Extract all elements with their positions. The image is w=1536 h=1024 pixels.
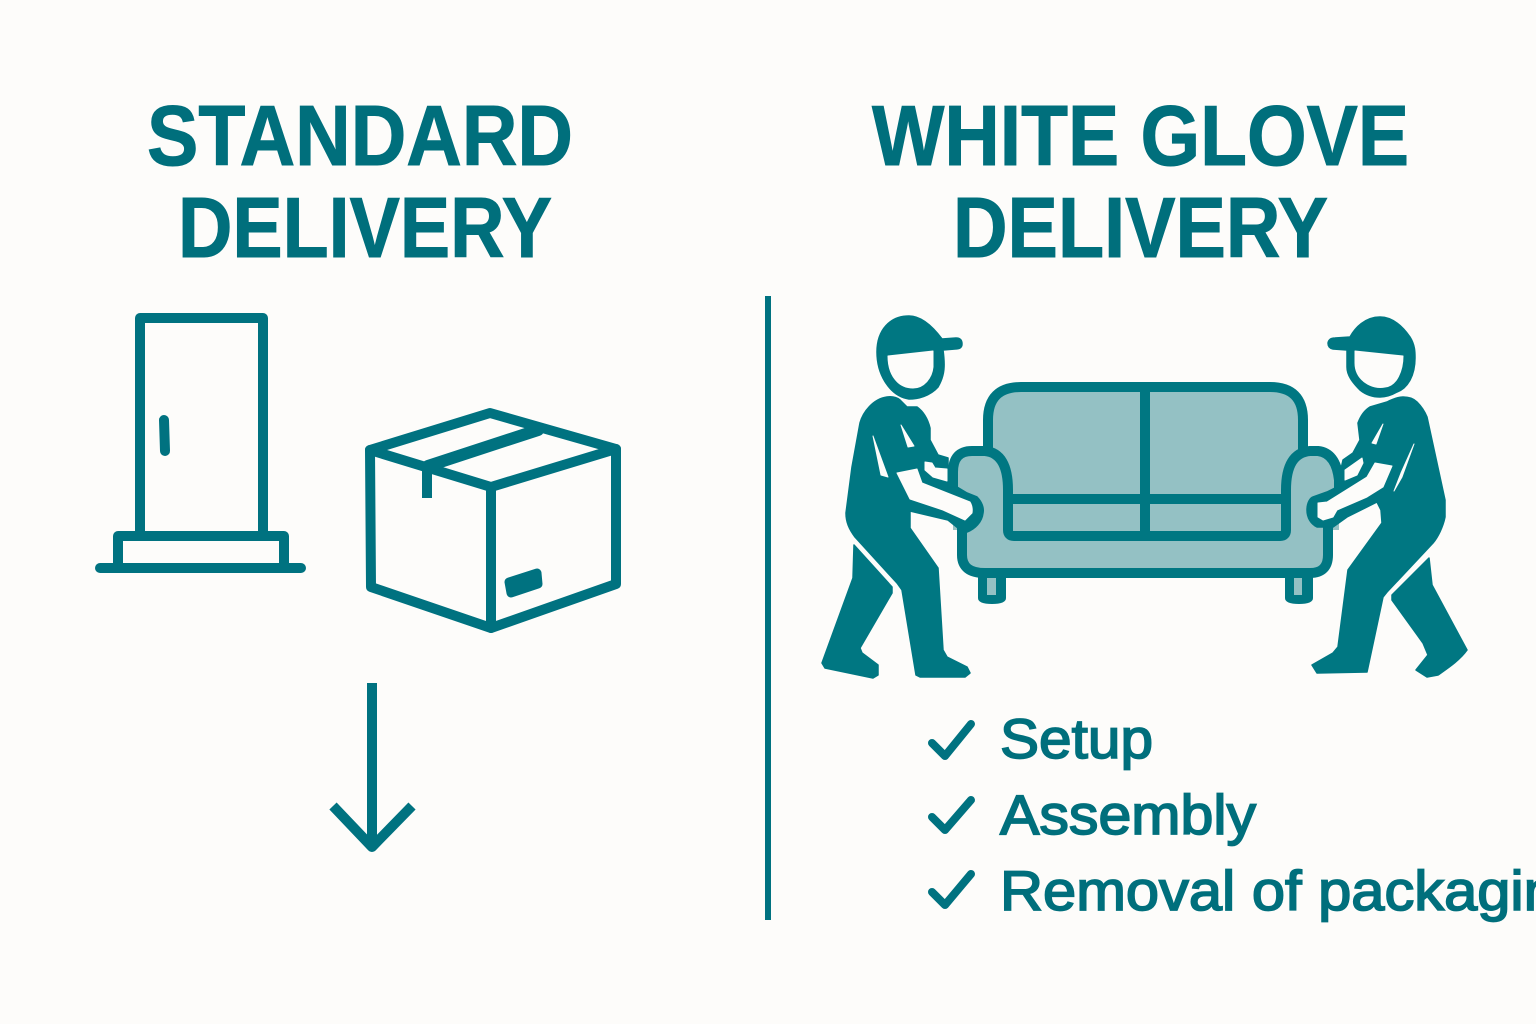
face [1355,351,1403,388]
item: assembly: Assembly [1000,783,1256,846]
body and arm [1307,397,1445,673]
icon: right mover [1307,317,1467,677]
icon: cardboard box [370,413,616,628]
back leg [822,545,892,678]
icon: door [100,318,301,568]
arm highlight [1318,463,1392,520]
heading: white glove delivery: WHITE GLOVE [872,89,1409,184]
back leg [1392,558,1467,677]
heading: white glove delivery: DELIVERY [953,181,1328,276]
panel: white glove delivery [822,89,1536,922]
face [888,351,933,388]
heading: white glove delivery [872,89,1409,276]
icon: left mover [822,316,983,678]
checklist [932,707,1536,922]
arm highlight [897,469,972,520]
head and cap [877,316,962,399]
heading: standard delivery: STANDARD [147,89,573,184]
head and cap [1328,317,1415,397]
heading: standard delivery: DELIVERY [178,181,552,276]
panel: standard delivery [100,89,616,847]
arrow: down [333,683,412,847]
icon: sofa [953,387,1339,604]
heading: standard delivery [147,89,573,276]
divider [765,296,771,920]
item: setup: Setup [1000,707,1153,770]
item: setup [932,707,1153,770]
body and arm [846,397,983,677]
sofa legs [978,576,1313,604]
